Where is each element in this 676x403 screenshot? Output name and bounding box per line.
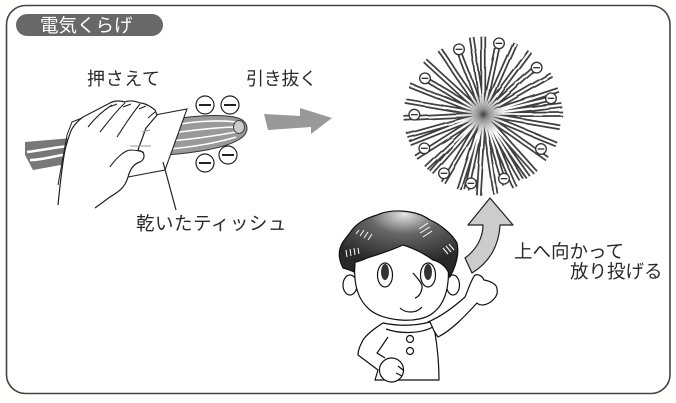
strands: outlines: [404, 37, 563, 195]
heading: title pill: 電気くらげ: [40, 15, 133, 36]
heading: title pill: [16, 14, 163, 36]
boy: fist: [379, 358, 404, 382]
strands: wavy bundle: [404, 37, 563, 195]
boy: nose and mouth: [400, 273, 422, 312]
strands: left bundle: [25, 138, 72, 170]
boy: buttons: [406, 336, 414, 354]
hand: [58, 101, 157, 208]
boy: hair: [339, 211, 458, 277]
boy: eyes: [378, 263, 436, 287]
hand: cuff: [58, 118, 82, 185]
arrow: throw upward: [465, 198, 513, 273]
text: press: 押さえて: [87, 69, 160, 89]
text: pull out: 引き抜く: [246, 69, 317, 89]
boy: ears: [343, 275, 460, 295]
boy: collar and arm crease: [377, 327, 433, 358]
illustration: boy: [339, 211, 497, 382]
text: toward the top: 上へ向かって: [514, 241, 624, 262]
boy: hair highlights: [346, 223, 454, 257]
charges: minus circles on strand tips: [409, 38, 556, 189]
illustration: strands held under hand and tissue: [25, 101, 247, 210]
hand: finger lines: [88, 103, 155, 167]
strands: white centres: [404, 37, 563, 195]
illustration: spread strands: [404, 37, 563, 195]
arrow: pull direction: [264, 108, 332, 134]
charges: minus circles near loop: [196, 96, 239, 172]
tissue: [125, 109, 187, 177]
boy: body and left arm: [358, 322, 439, 380]
text: dry tissue: 乾いたティッシュ: [136, 213, 287, 234]
boy: raised arm and hand: [428, 275, 497, 337]
boy: face: [355, 239, 448, 320]
strands: dark core: [460, 91, 507, 138]
tissue: pointer line: [163, 162, 176, 210]
boy: pupils: [381, 264, 432, 280]
strands: right loop: [165, 116, 247, 155]
tissue: crease marks: [130, 130, 151, 146]
text: throw: 放り投げる: [570, 261, 663, 282]
